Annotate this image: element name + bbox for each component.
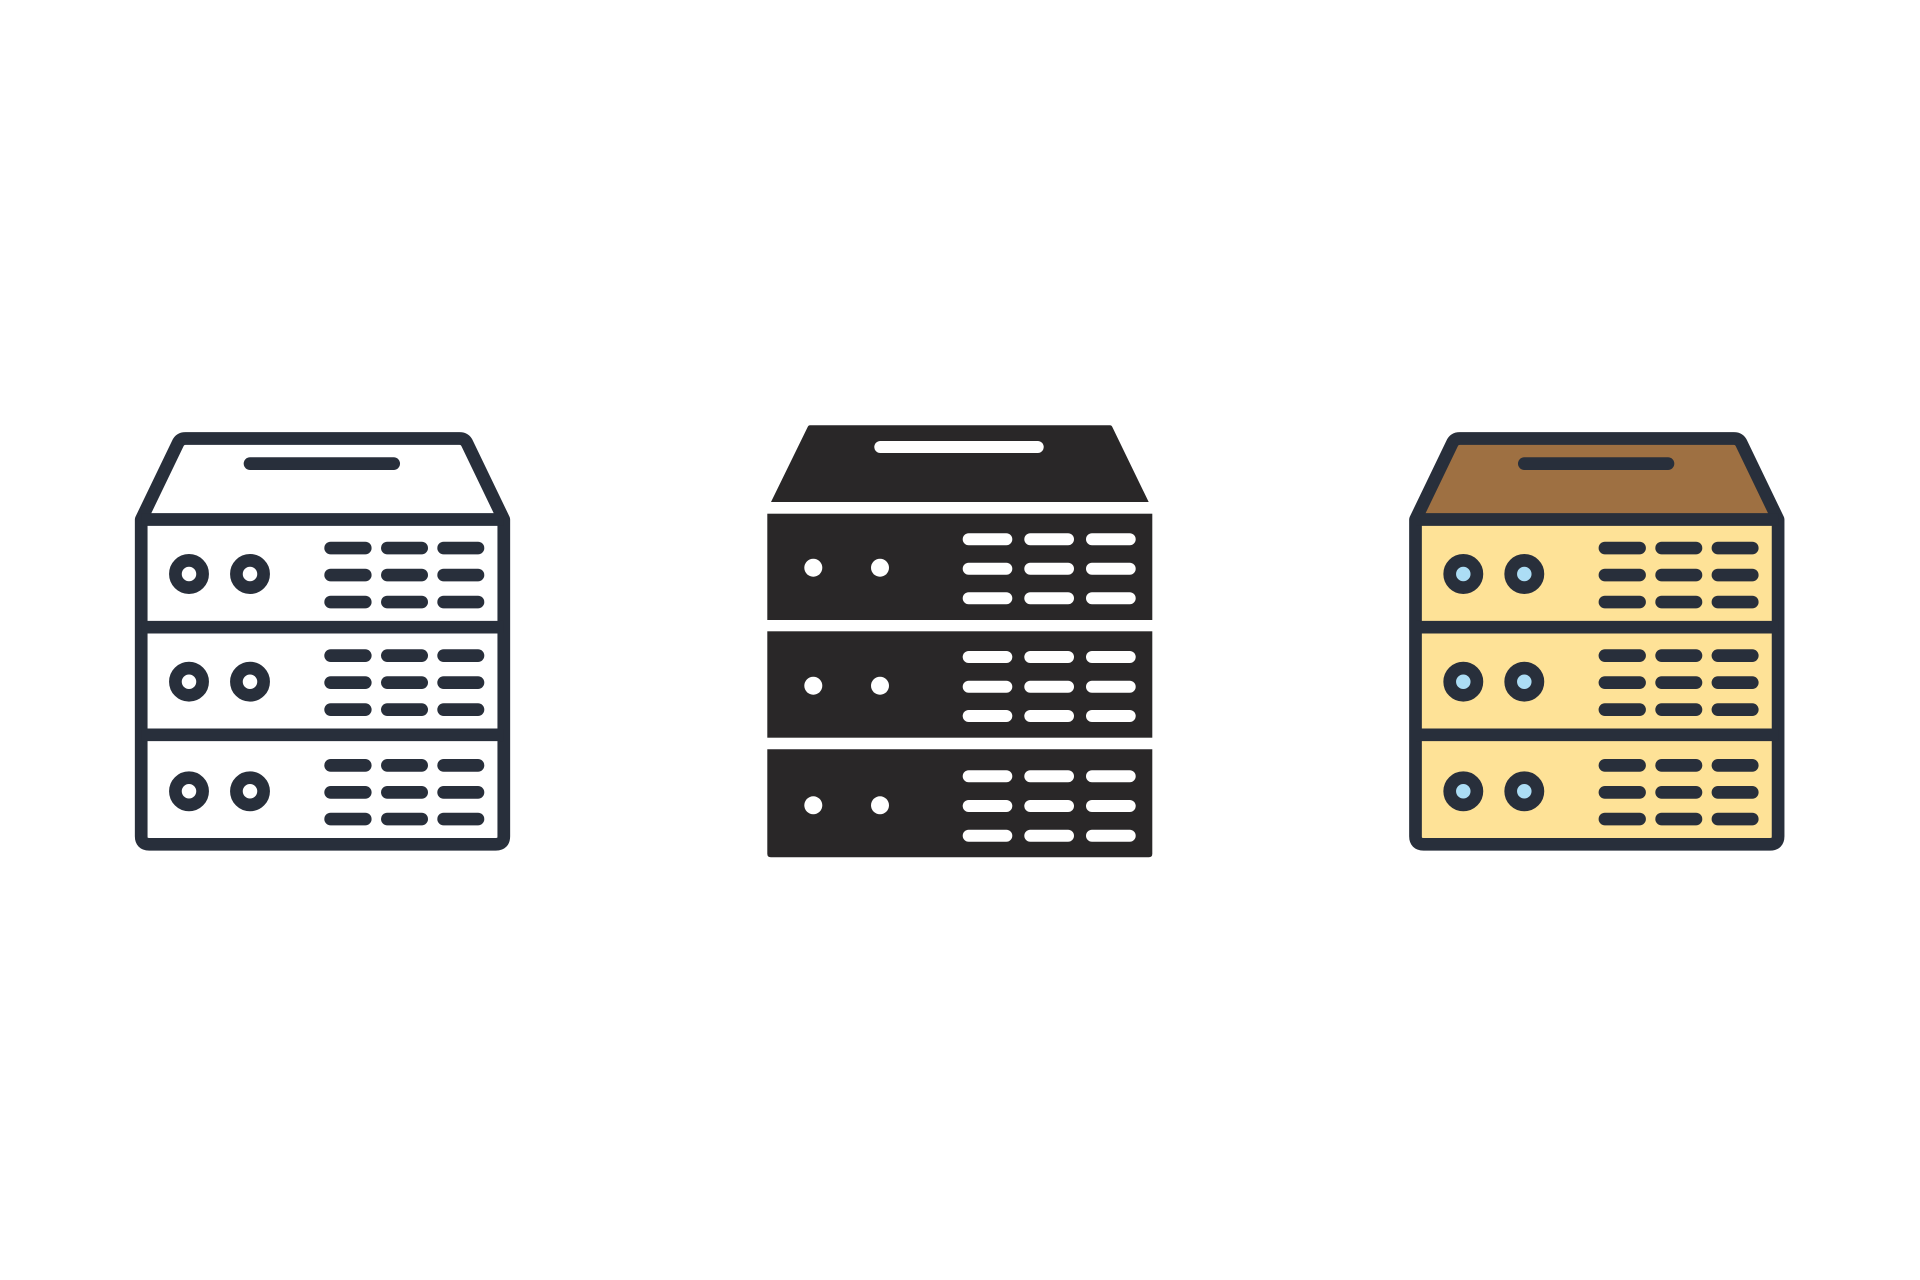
solid roof <box>771 425 1149 502</box>
roof fill <box>1416 438 1778 520</box>
icon: outline server rack <box>141 438 504 844</box>
icon: coloured server rack <box>1416 438 1778 844</box>
rack body fill <box>1416 520 1778 844</box>
roof slot <box>874 441 1044 453</box>
solid rack panels <box>767 514 1152 857</box>
rack body outline <box>1416 438 1778 844</box>
vent bars <box>963 533 1136 842</box>
roof slot <box>244 457 400 470</box>
roof slot <box>1518 457 1674 470</box>
vent bars <box>324 542 484 825</box>
indicator lights <box>1450 560 1538 805</box>
rack body outline <box>141 438 504 844</box>
icon: solid server rack <box>767 425 1152 857</box>
indicator dots <box>804 559 889 814</box>
vent bars <box>1599 542 1759 825</box>
indicator lights <box>175 560 264 805</box>
